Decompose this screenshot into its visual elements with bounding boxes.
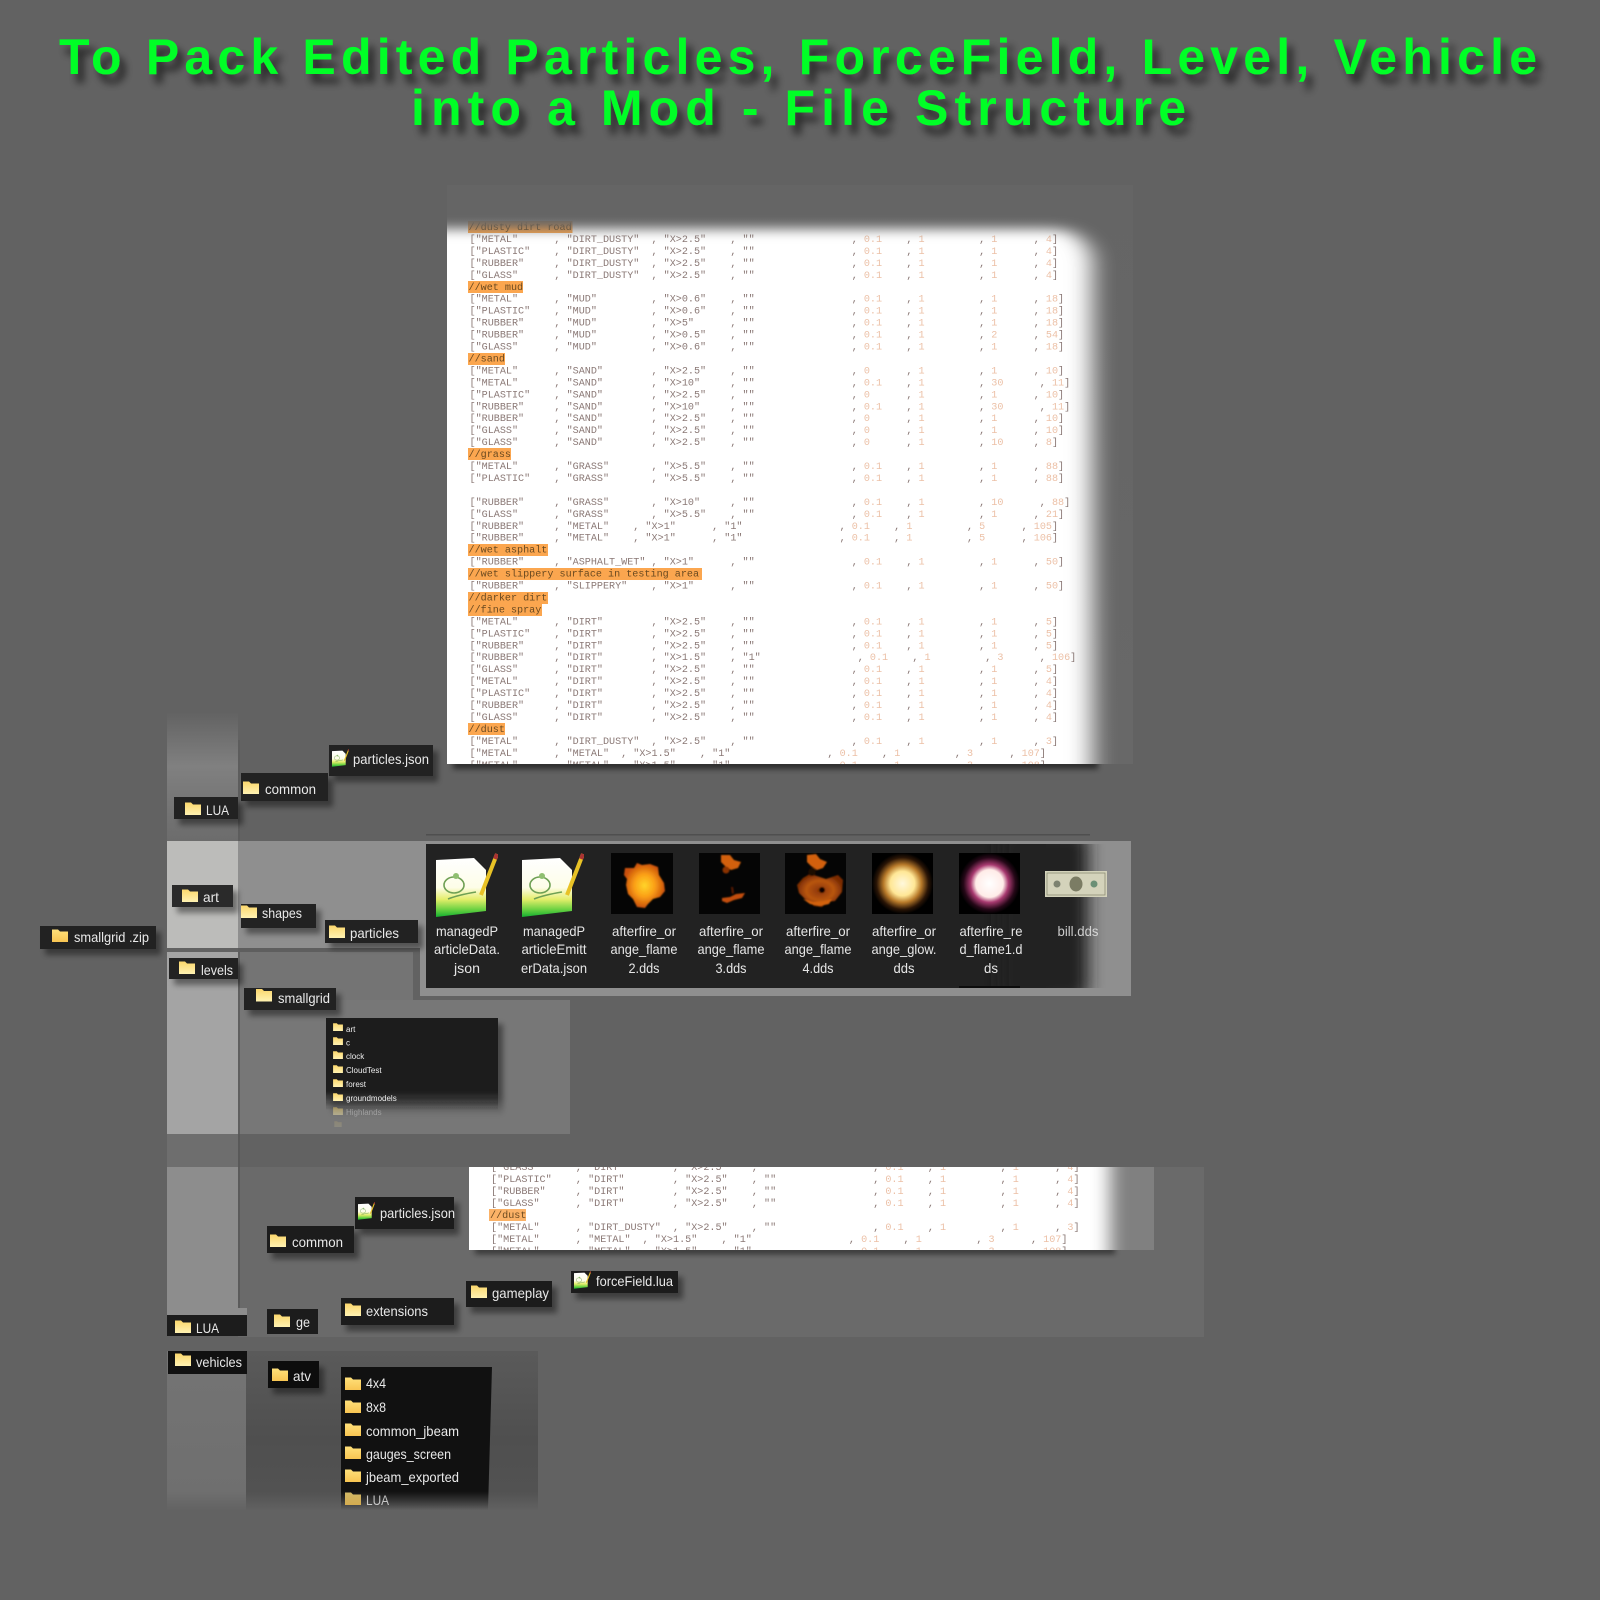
file labels: managedP <box>436 923 498 939</box>
file labels: ds <box>984 960 998 976</box>
panel: levels folder list: forest <box>346 1080 367 1089</box>
file labels: json <box>453 960 480 976</box>
code lines: ["RUBBER" , "GRASS" , "X>10" , "" , 0.1 , 1 , 10 , 88] <box>470 497 1070 509</box>
code lines: ["METAL" , "METAL" , "X>1.5" , "1" , 0.1 , 1 , 3 , 107] <box>470 748 1046 760</box>
code lines: ["METAL" , "SAND" , "X>2.5" , "" , 0 , 1 , 1 , 10] <box>470 365 1064 377</box>
label: LUA 2 <box>167 1315 247 1336</box>
file labels: erData.json <box>521 960 587 976</box>
panel: LUA column top <box>167 712 238 841</box>
line above art panel <box>426 834 1090 836</box>
label: smallgrid .zip <box>40 926 156 949</box>
file labels: dds <box>894 960 914 976</box>
label: ge <box>267 1309 318 1334</box>
panel: vehicles folder list: 8x8 <box>366 1399 386 1415</box>
code lines 2 <box>490 1167 1078 1250</box>
label: common: common <box>265 781 316 797</box>
label: extensions: extensions <box>366 1303 428 1319</box>
panel: vehicles folder list: 4x4 <box>366 1375 386 1391</box>
file labels: ange_flame <box>784 941 852 957</box>
panel: vehicles folder list: LUA <box>366 1492 390 1508</box>
file labels: managedP <box>523 923 585 939</box>
label: art <box>172 885 233 907</box>
code lines: ["RUBBER" , "METAL" , "X>1" , "1" , 0.1 , 1 , 5 , 106] <box>470 533 1058 545</box>
panel: vehicles folder list: gauges_screen <box>366 1446 451 1462</box>
label: vehicles <box>168 1351 247 1374</box>
file labels: afterfire_or <box>612 923 676 939</box>
file labels: 4.dds <box>802 960 834 976</box>
thumbnail: red flame <box>959 853 1020 914</box>
file labels: ange_glow. <box>872 941 936 957</box>
panel: levels folder list: clock <box>346 1052 365 1061</box>
code lines: ["PLASTIC" , "GRASS" , "X>5.5" , "" , 0.1 , 1 , 1 , 88] <box>470 473 1064 485</box>
code lines 2: ["METAL" , "METAL" , "X>1.5" , "1" , 0.1 , 1 , 3 , 107] <box>491 1234 1067 1246</box>
panel: levels folder list: art <box>346 1025 356 1034</box>
label: forceField.lua: forceField.lua <box>596 1273 673 1289</box>
code lines: ["METAL" , "GRASS" , "X>5.5" , "" , 0.1 , 1 , 1 , 88] <box>470 461 1064 473</box>
code lines: ["METAL" , "DIRT_DUSTY" , "X>2.5" , "" , 0.1 , 1 , 1 , 4] <box>470 234 1058 246</box>
panel: particles.json code view <box>447 185 1133 772</box>
label: common 2: common <box>292 1234 343 1250</box>
code lines: //darker dirt <box>468 592 547 604</box>
code lines: //wet mud <box>468 282 523 294</box>
thumbnail: glow <box>872 853 933 914</box>
code lines: ["RUBBER" , "SLIPPERY" , "X>1" , "" , 0.1 , 1 , 1 , 50] <box>470 580 1064 592</box>
thumbnail: flame 3 <box>699 853 760 914</box>
file labels: bill.dds <box>1058 923 1098 939</box>
file labels: 3.dds <box>716 960 746 976</box>
title <box>59 29 1537 136</box>
title: into a Mod - File Structure <box>411 80 1186 136</box>
code lines 2: ["PLASTIC" , "DIRT" , "X>2.5" , "" , 0.1 , 1 , 1 , 4] <box>491 1174 1080 1186</box>
file labels: d_flame1.d <box>960 941 1022 957</box>
panel: vehicles folder list: jbeam_exported <box>365 1469 459 1485</box>
code lines: ["METAL" , "DIRT_DUSTY" , "X>2.5" , "" , 0.1 , 1 , 1 , 3] <box>470 736 1058 748</box>
panel: levels folder list: groundmodels <box>346 1094 397 1103</box>
label: particles.json 2 <box>355 1197 455 1229</box>
code lines: //fine spray <box>468 604 541 616</box>
code lines: ["PLASTIC" , "SAND" , "X>2.5" , "" , 0 , 1 , 1 , 10] <box>470 389 1064 401</box>
code lines 2: ["GLASS" , "DIRT" , "X>2.5" , "" , 0.1 , 1 , 1 , 4] <box>491 1162 1080 1174</box>
code lines: ["METAL" , "MUD" , "X>0.6" , "" , 0.1 , 1 , 1 , 18] <box>470 294 1064 306</box>
label: LUA 2: LUA <box>196 1320 220 1336</box>
file labels: ange_flame <box>698 941 765 957</box>
label: particles.json: particles.json <box>353 751 429 767</box>
panel: levels folder list: CloudTest <box>346 1066 382 1075</box>
code lines: ["GLASS" , "DIRT_DUSTY" , "X>2.5" , "" , 0.1 , 1 , 1 , 4] <box>470 270 1058 282</box>
panel: particles folder contents <box>426 844 1107 988</box>
code lines: //wet slippery surface in testing area <box>468 569 699 581</box>
code lines: ["GLASS" , "SAND" , "X>2.5" , "" , 0 , 1 , 1 , 10] <box>470 425 1064 437</box>
label: particles.json 2: particles.json <box>380 1205 455 1221</box>
code lines: //dusty dirt road <box>468 222 572 234</box>
label: levels: levels <box>201 962 233 978</box>
code lines: ["RUBBER" , "DIRT" , "X>1.5" , "1" , 0.1 , 1 , 3 , 106] <box>470 652 1076 664</box>
code lines: ["GLASS" , "DIRT" , "X>2.5" , "" , 0.1 , 1 , 1 , 5] <box>470 664 1058 676</box>
title: To Pack Edited Particles, ForceField, Level, Vehicle <box>59 29 1537 85</box>
label: smallgrid: smallgrid <box>278 990 330 1006</box>
label: vehicles: vehicles <box>196 1354 242 1370</box>
panel: vehicles folder list: common_jbeam <box>366 1423 459 1439</box>
code lines: ["GLASS" , "SAND" , "X>2.5" , "" , 0 , 1 , 10 , 8] <box>470 437 1058 449</box>
file labels: afterfire_or <box>786 923 850 939</box>
label: gameplay <box>466 1281 552 1307</box>
panel: vehicles section <box>167 1351 538 1511</box>
code lines: //sand <box>468 353 505 365</box>
code lines 2: ["METAL" , "METAL" , "X>1.5" , "1" , 0.1 , 1 , 3 , 108] <box>491 1246 1067 1258</box>
code lines: ["PLASTIC" , "DIRT" , "X>2.5" , "" , 0.1 , 1 , 1 , 4] <box>470 688 1058 700</box>
icon: notepad file <box>436 854 497 917</box>
panel: vehicles folder list <box>341 1367 492 1510</box>
code lines <box>468 222 1076 772</box>
label: levels <box>169 958 238 979</box>
code lines: ["METAL" , "SAND" , "X>10" , "" , 0.1 , 1 , 30 , 11] <box>470 377 1070 389</box>
file labels: afterfire_re <box>960 923 1023 939</box>
thumbnail: flame 2 <box>611 853 673 914</box>
panel: column connector <box>167 1134 238 1167</box>
file labels: afterfire_or <box>872 923 936 939</box>
code lines: //grass <box>468 449 511 461</box>
panel: levels folder list: c <box>346 1039 350 1048</box>
code lines: ["RUBBER" , "SAND" , "X>10" , "" , 0.1 , 1 , 30 , 11] <box>470 401 1070 413</box>
file labels: articleData. <box>434 941 500 957</box>
label: particles: particles <box>350 925 399 941</box>
code lines: ["METAL" , "DIRT" , "X>2.5" , "" , 0.1 , 1 , 1 , 4] <box>470 676 1058 688</box>
code lines: ["RUBBER" , "DIRT" , "X>2.5" , "" , 0.1 , 1 , 1 , 4] <box>470 700 1058 712</box>
label: common 2 <box>267 1226 354 1253</box>
panel: levels folder list: Highlands <box>346 1108 382 1117</box>
file labels: ange_flame <box>610 941 678 957</box>
label: particles.json <box>329 745 433 776</box>
code lines: ["METAL" , "DIRT" , "X>2.5" , "" , 0.1 , 1 , 1 , 5] <box>470 616 1058 628</box>
panel: particles.json code view 2 <box>469 1162 1154 1258</box>
label: LUA: LUA <box>206 802 230 818</box>
code lines: ["RUBBER" , "SAND" , "X>2.5" , "" , 0 , 1 , 1 , 10] <box>470 413 1064 425</box>
code highlights <box>468 221 702 735</box>
code lines: ["GLASS" , "DIRT" , "X>2.5" , "" , 0.1 , 1 , 1 , 4] <box>470 712 1058 724</box>
label: LUA <box>174 797 238 819</box>
label: forceField.lua <box>571 1271 678 1293</box>
code lines: //wet asphalt <box>468 545 547 557</box>
code lines: ["GLASS" , "GRASS" , "X>5.5" , "" , 0.1 , 1 , 1 , 21] <box>470 509 1064 521</box>
code lines: ["PLASTIC" , "DIRT" , "X>2.5" , "" , 0.1 , 1 , 1 , 5] <box>470 628 1058 640</box>
label: art: art <box>203 889 219 905</box>
code lines: ["METAL" , "METAL" , "X>1.5" , "1" , 0.1 , 1 , 3 , 108] <box>470 760 1046 772</box>
panel: art section <box>167 841 1131 996</box>
code lines: ["RUBBER" , "ASPHALT_WET" , "X>1" , "" , 0.1 , 1 , 1 , 50] <box>470 557 1064 569</box>
file labels <box>434 923 1098 976</box>
file labels: afterfire_or <box>699 923 763 939</box>
label: shapes <box>241 904 316 928</box>
label: extensions <box>341 1298 454 1325</box>
thumbnail: bill <box>1045 871 1107 897</box>
label: particles <box>325 920 418 943</box>
code lines 2: //dust <box>490 1210 526 1222</box>
code lines: ["GLASS" , "MUD" , "X>0.6" , "" , 0.1 , 1 , 1 , 18] <box>470 342 1064 354</box>
code lines 2: ["RUBBER" , "DIRT" , "X>2.5" , "" , 0.1 , 1 , 1 , 4] <box>491 1186 1080 1198</box>
label: gameplay: gameplay <box>492 1285 549 1301</box>
code highlight: dust <box>489 1209 526 1221</box>
code lines: ["RUBBER" , "MUD" , "X>0.5" , "" , 0.1 , 1 , 2 , 54] <box>470 330 1064 342</box>
label: smallgrid .zip: smallgrid .zip <box>74 929 149 945</box>
label: atv: atv <box>293 1368 311 1384</box>
panel: levels folder list <box>326 1018 498 1127</box>
code lines 2: ["METAL" , "DIRT_DUSTY" , "X>2.5" , "" , 0.1 , 1 , 1 , 3] <box>491 1222 1080 1234</box>
code lines: ["PLASTIC" , "MUD" , "X>0.6" , "" , 0.1 , 1 , 1 , 18] <box>470 306 1064 318</box>
icon: notepad file 2 <box>522 854 583 917</box>
code lines: ["RUBBER" , "DIRT" , "X>2.5" , "" , 0.1 , 1 , 1 , 5] <box>470 640 1058 652</box>
label: smallgrid <box>244 988 336 1010</box>
file labels: 2.dds <box>628 960 660 976</box>
panel: LUA section <box>167 1167 1204 1337</box>
thumbnail: flame 4 <box>785 853 846 914</box>
panel: levels section <box>167 948 570 1134</box>
label: atv <box>268 1361 319 1388</box>
code lines: ["RUBBER" , "METAL" , "X>1" , "1" , 0.1 , 1 , 5 , 105] <box>470 521 1058 533</box>
label: common <box>241 773 328 801</box>
label: shapes: shapes <box>262 905 302 921</box>
code lines: ["RUBBER" , "DIRT_DUSTY" , "X>2.5" , "" , 0.1 , 1 , 1 , 4] <box>470 258 1058 270</box>
file labels: articleEmitt <box>522 941 587 957</box>
code lines: //dust <box>468 724 505 736</box>
label: ge: ge <box>296 1314 310 1330</box>
code lines 2: ["GLASS" , "DIRT" , "X>2.5" , "" , 0.1 , 1 , 1 , 4] <box>491 1198 1080 1210</box>
code lines: ["PLASTIC" , "DIRT_DUSTY" , "X>2.5" , "" , 0.1 , 1 , 1 , 4] <box>470 246 1058 258</box>
code lines: ["RUBBER" , "MUD" , "X>5" , "" , 0.1 , 1 , 1 , 18] <box>470 318 1064 330</box>
